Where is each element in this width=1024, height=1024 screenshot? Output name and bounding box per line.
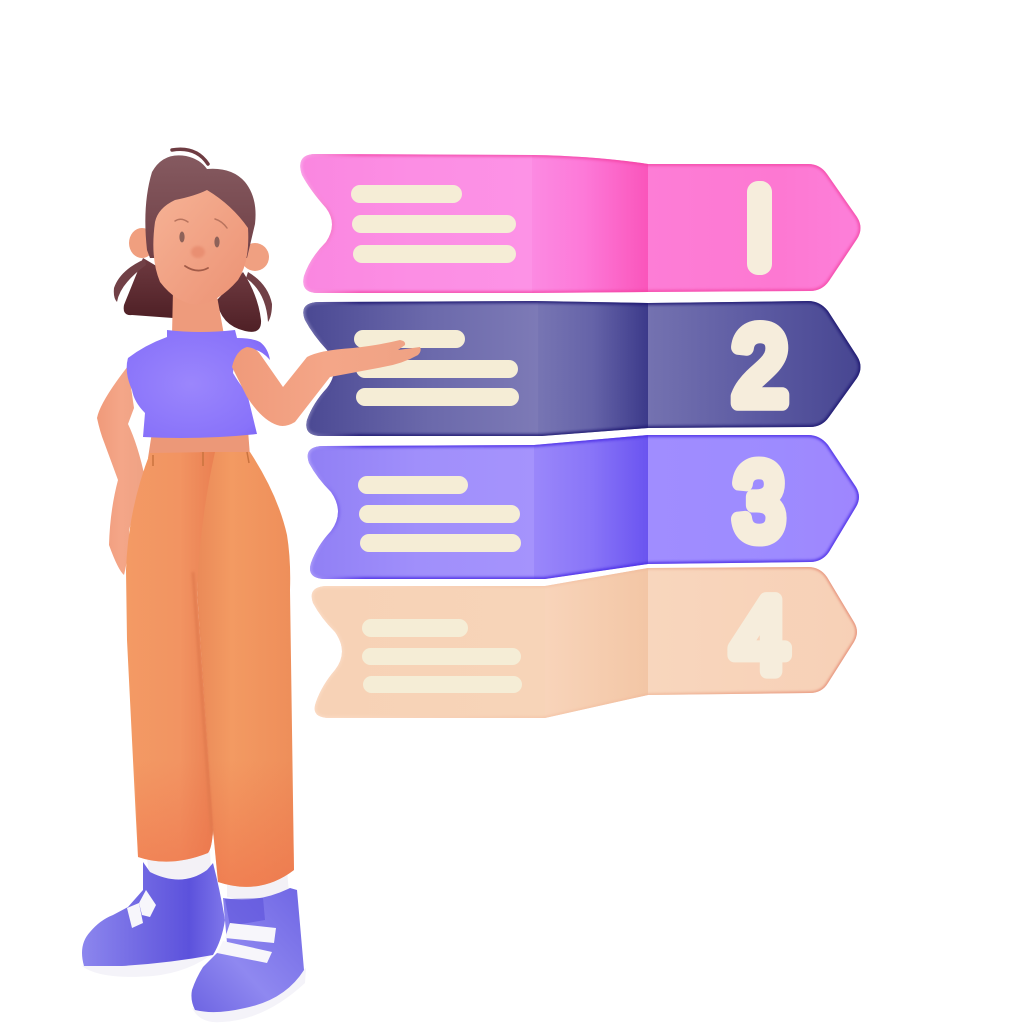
number 4: 4 (732, 577, 788, 693)
hair strand (172, 149, 208, 164)
back arm (97, 366, 145, 575)
number 1 (747, 181, 772, 275)
number 2: 2 (733, 306, 787, 426)
panel: arrow banner 1 (pink) (295, 150, 868, 300)
left sock (146, 850, 211, 879)
text lines (362, 619, 522, 693)
text lines (354, 330, 519, 406)
panel: arrow banner 4 (peach) (312, 567, 857, 718)
right shoe (191, 888, 306, 1022)
front arm and hand (232, 340, 421, 426)
face features (175, 219, 227, 271)
text lines (351, 185, 516, 263)
panel: arrow banner 2 (navy) (295, 295, 868, 440)
face (153, 190, 248, 305)
panel: arrow banner 3 (violet) (300, 430, 868, 585)
illustration: presenter character (82, 149, 421, 1022)
left leg and right leg (pants) (126, 452, 294, 887)
left shoe (82, 862, 225, 977)
text lines (358, 476, 521, 552)
hair back (145, 155, 256, 258)
midriff (148, 430, 250, 458)
ears (129, 228, 269, 271)
top (127, 330, 270, 438)
neck (172, 290, 224, 335)
number 3: 3 (734, 442, 784, 561)
right sock (227, 870, 289, 900)
lower hair (114, 258, 272, 332)
